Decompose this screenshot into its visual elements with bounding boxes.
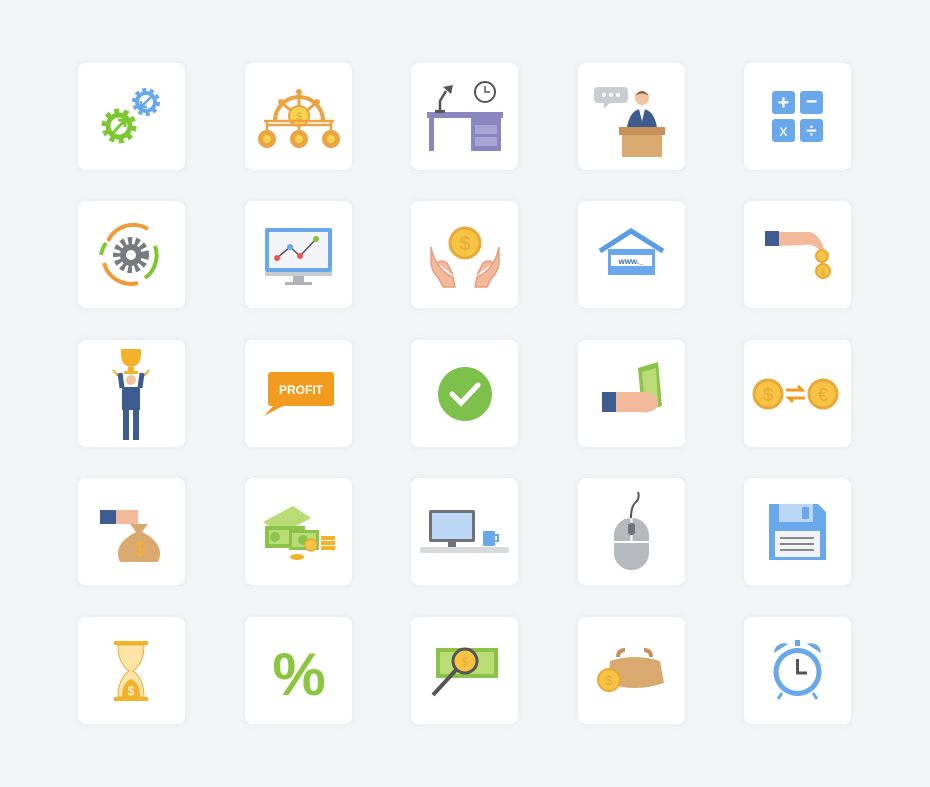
card: helm hierarchy — [245, 63, 352, 170]
card: profit bubble — [245, 340, 352, 447]
card: floppy — [744, 478, 851, 585]
card: percent — [245, 617, 352, 724]
card: desk — [411, 63, 518, 170]
card: hand dropping coins: $ — [820, 267, 826, 277]
card: hourglass: $ — [128, 684, 135, 698]
card: alarm clock — [744, 617, 851, 724]
card: trophy man — [78, 340, 185, 447]
card: hourglass — [78, 617, 185, 724]
card: monitor chart — [245, 201, 352, 308]
card: money bag — [78, 478, 185, 585]
card: calculator: ÷ — [806, 121, 817, 142]
card: currency exchange: € — [818, 385, 828, 405]
card: www house: www._ — [617, 257, 644, 266]
card: hand dropping coins — [744, 201, 851, 308]
card: speaker — [578, 63, 685, 170]
card: currency exchange: $ — [763, 385, 773, 405]
card: computer mug — [411, 478, 518, 585]
card: cash stacks — [245, 478, 352, 585]
card: currency exchange — [744, 340, 851, 447]
card: money search: $ — [462, 655, 469, 669]
card: calculator: x — [780, 123, 788, 140]
card: calculator: − — [806, 91, 817, 113]
icon: green gear — [104, 111, 134, 141]
card: percent: % — [272, 641, 326, 708]
card: gears — [78, 63, 185, 170]
card: profit bubble: PROFIT — [279, 383, 324, 397]
card: helm hierarchy: $ — [296, 111, 302, 123]
card: hand cash — [578, 340, 685, 447]
card: check — [411, 340, 518, 447]
card: money search — [411, 617, 518, 724]
card: hands coin — [411, 201, 518, 308]
card: mouse — [578, 478, 685, 585]
card: www house — [578, 201, 685, 308]
card: calculator: + — [778, 92, 789, 114]
card: calculator — [744, 63, 851, 170]
card: hands coin: $ — [460, 234, 471, 255]
card: purse: $ — [605, 673, 613, 688]
card: money bag: $ — [134, 539, 146, 561]
card: purse — [578, 617, 685, 724]
card: gear cycle — [78, 201, 185, 308]
